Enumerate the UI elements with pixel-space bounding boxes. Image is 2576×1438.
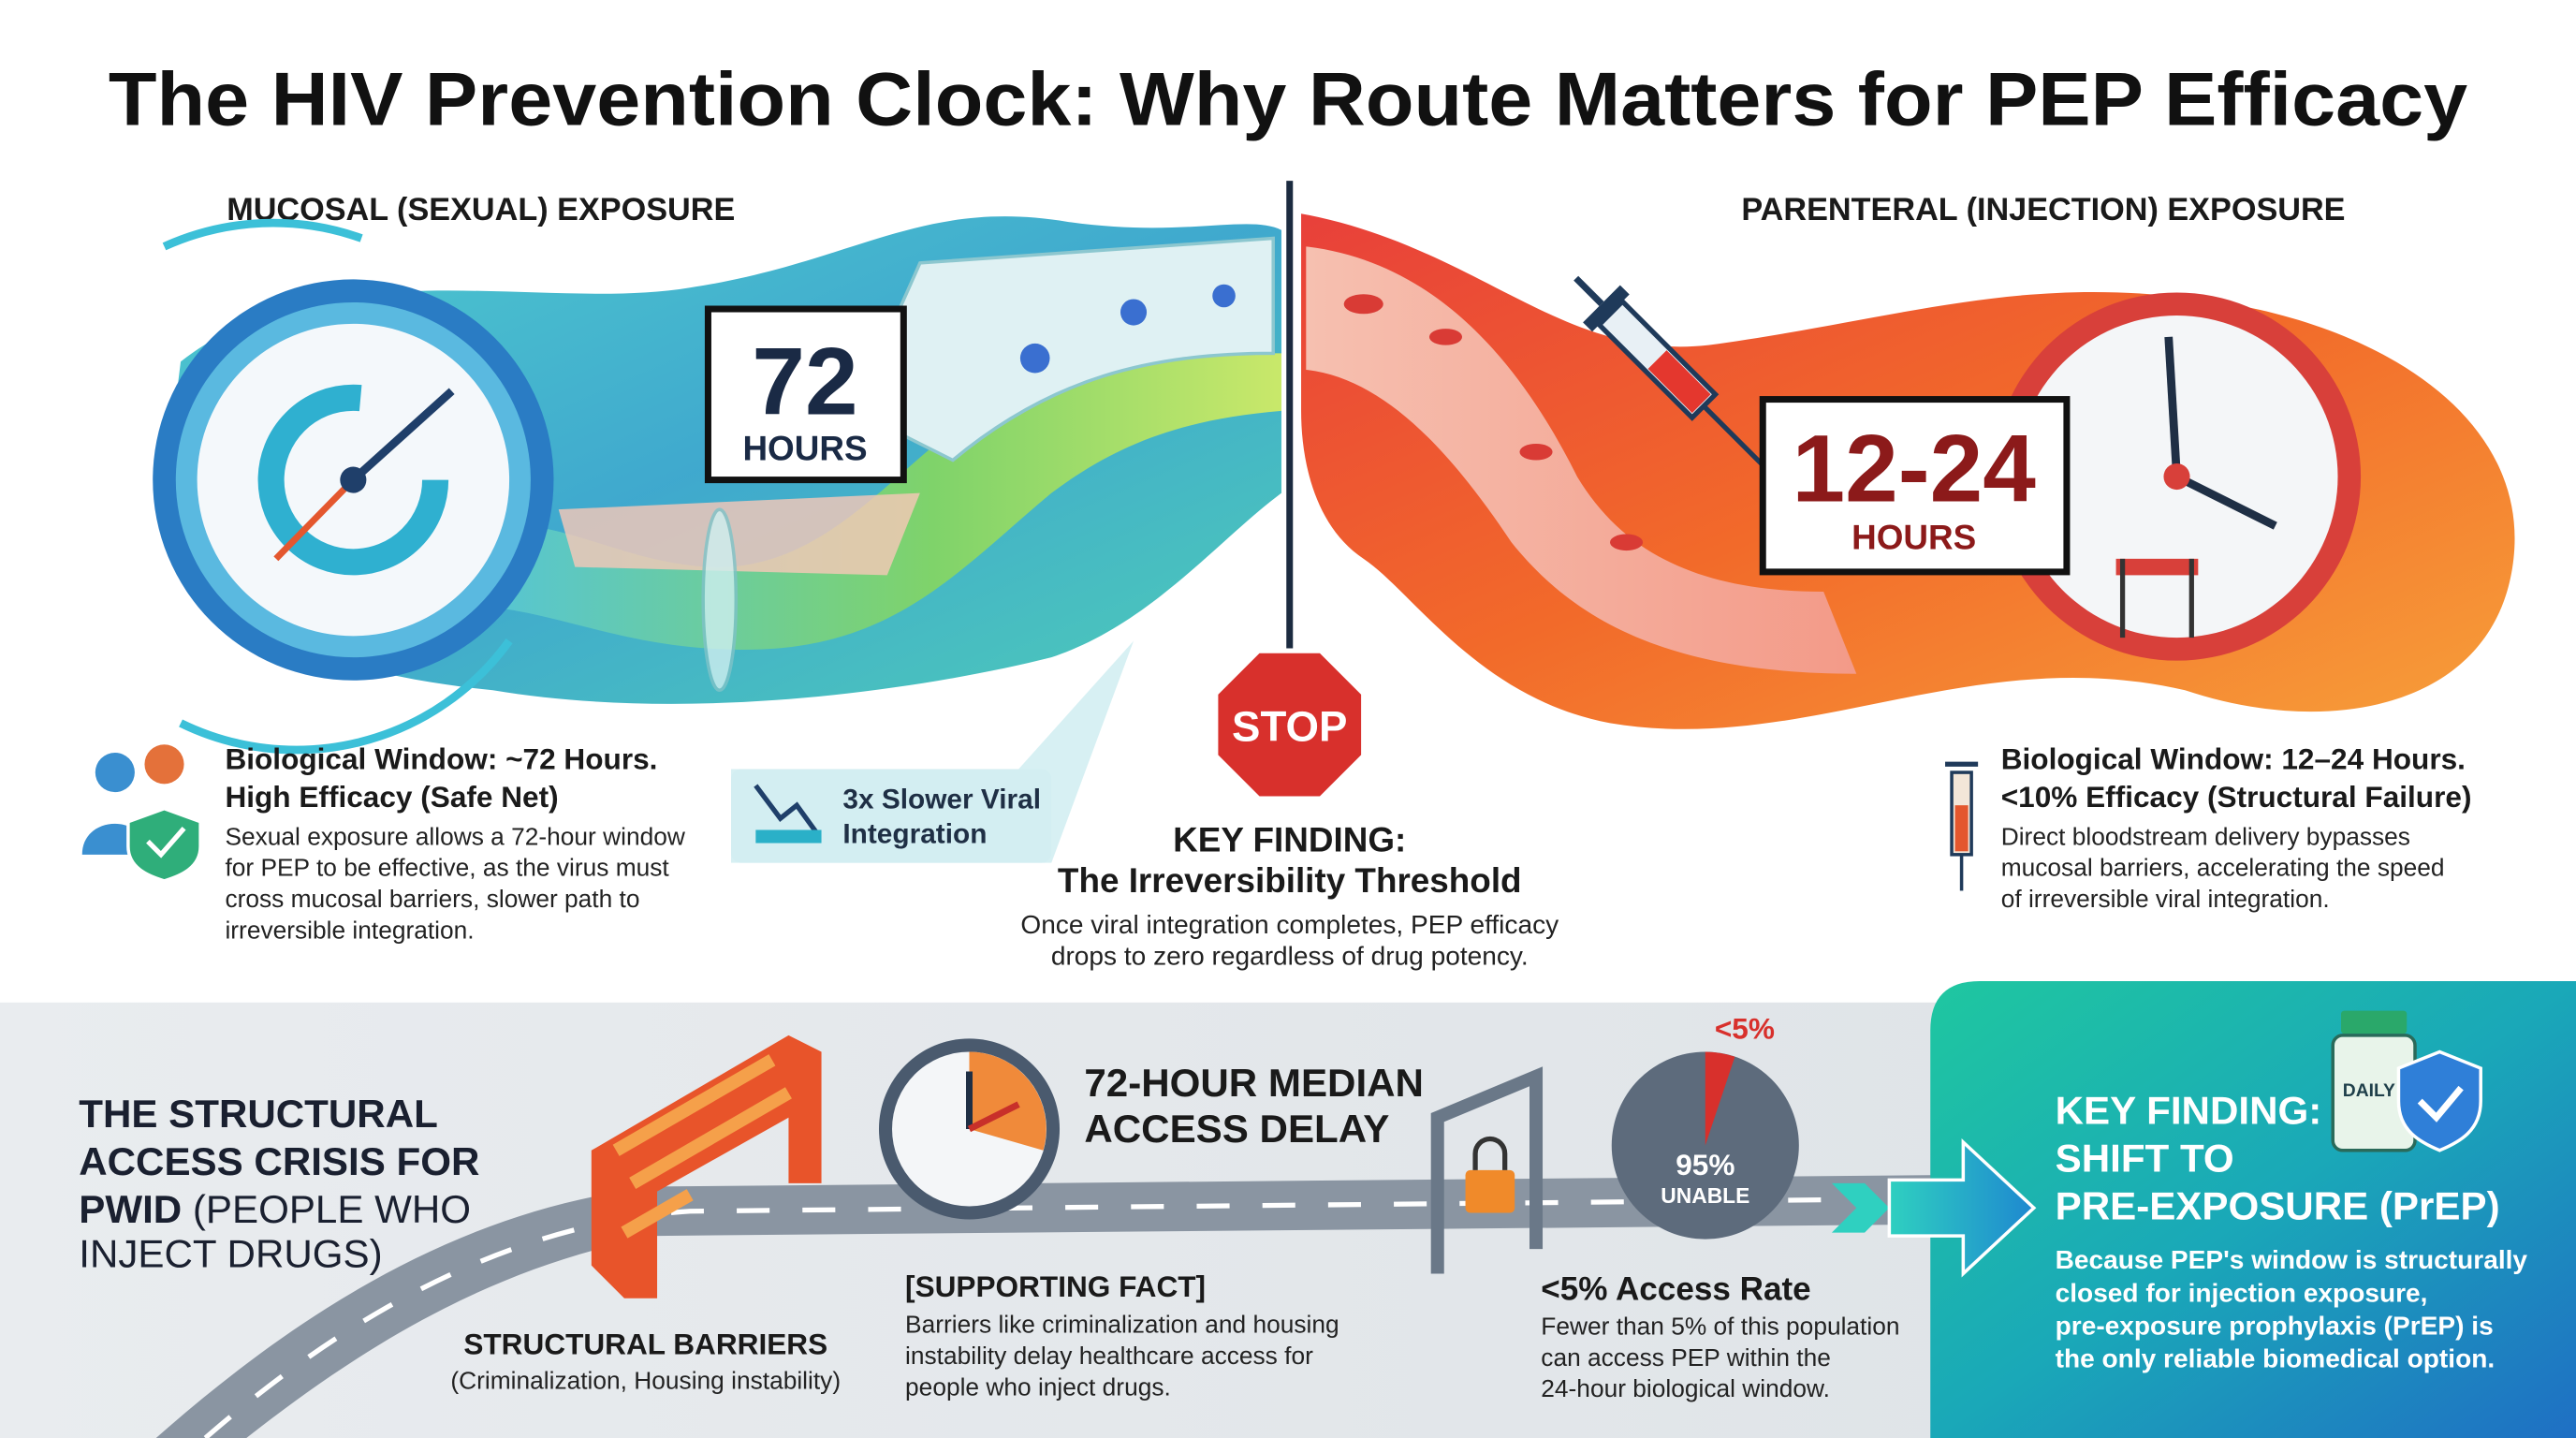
panel: key finding shift to prep: Because PEP's window is structurally [2056,1245,2527,1274]
text: mucosal biological window: High Efficacy (Safe Net) [225,780,559,814]
text: structural barriers: (Criminalization, Housing instability) [450,1366,841,1394]
panel: key finding shift to prep: pre-exposure prophylaxis (PrEP) is [2056,1311,2494,1340]
text: key finding irreversibility: Once viral integration completes, PEP efficacy [1020,910,1559,939]
callout: 72 hours: 72 [752,328,858,434]
text: key finding irreversibility: drops to zero regardless of drug potency. [1051,941,1529,970]
text: structural barriers [450,1327,841,1394]
text: mucosal biological window: for PEP to be effective, as the virus must [225,854,669,882]
chart: pie 95% unable: UNABLE [1661,1183,1749,1208]
text: supporting fact [905,1269,1339,1401]
title: The HIV Prevention Clock: Why Route Matters for PEP Efficacy [109,57,2467,141]
icon: pill bottle and shield [2333,1011,2481,1151]
heading: structural access crisis: PWID (PEOPLE WHO [79,1187,471,1231]
text: mucosal biological window: Sexual exposure allows a 72-hour window [225,822,686,850]
icon: pill bottle and shield: DAILY [2343,1081,2395,1101]
text: supporting fact: instability delay healthcare access for [905,1342,1313,1370]
icon: stop sign [1216,651,1364,799]
callout: 3x slower viral integration: Integration [842,819,987,850]
text: parenteral biological window: Direct bloodstream delivery bypasses [2001,822,2410,850]
text: mucosal biological window: Biological Window: ~72 Hours. [225,742,657,776]
icon: syringe [1558,259,1792,494]
divider line [1288,181,1292,649]
icon: lock gate [1438,1077,1536,1273]
chart: pie 95% unable [1612,1011,1799,1240]
callout: 72 hours [708,309,903,480]
heading: mucosal: MUCOSAL (SEXUAL) EXPOSURE [227,192,735,227]
heading: structural access crisis [79,1092,479,1275]
panel: key finding shift to prep: closed for injection exposure, [2056,1278,2427,1307]
arrow: to prep [1832,1142,2034,1273]
text: access rate: can access PEP within the [1541,1343,1831,1372]
panel: key finding shift to prep: KEY FINDING: [2056,1089,2321,1133]
text: structural barriers: STRUCTURAL BARRIERS [463,1327,827,1360]
heading: 72-hour median access delay: ACCESS DELAY [1084,1107,1389,1151]
text: access rate: <5% Access Rate [1541,1271,1811,1308]
chart: pie 95% unable: <5% [1715,1011,1775,1045]
callout: 12-24 hours [1763,400,2067,572]
callout: 72 hours: HOURS [742,430,868,468]
icon: barrier [592,1035,822,1299]
heading: 72-hour median access delay: 72-HOUR MEDIAN [1084,1061,1424,1105]
panel: parenteral illustration [1301,213,2515,729]
chart: pie 95% unable: 95% [1676,1148,1734,1181]
text: access rate: Fewer than 5% of this population [1541,1312,1899,1340]
icon: left clock [153,223,553,750]
text: parenteral biological window: <10% Efficacy (Structural Failure) [2001,780,2471,814]
text: access rate: 24-hour biological window. [1541,1374,1830,1402]
text: key finding irreversibility: KEY FINDING: [1173,820,1406,858]
icon: stop sign: STOP [1232,703,1347,751]
icon: people with shield [82,744,200,881]
heading: 72-hour median access delay [1084,1061,1424,1151]
text: mucosal biological window: cross mucosal barriers, slower path to [225,885,640,913]
text: supporting fact: people who inject drugs. [905,1372,1171,1401]
text: access rate [1541,1271,1899,1402]
icon: delay clock [879,1038,1060,1220]
panel: key finding shift to prep [1930,981,2576,1438]
text: parenteral biological window: Biological Window: 12–24 Hours. [2001,742,2466,776]
text: parenteral biological window: of irreversible viral integration. [2001,885,2330,913]
panel: key finding shift to prep: PRE-EXPOSURE (PrEP) [2056,1184,2500,1228]
text: key finding irreversibility: The Irreversibility Threshold [1058,861,1522,900]
callout: 12-24 hours: 12-24 [1793,415,2036,521]
heading: structural access crisis: INJECT DRUGS) [79,1231,383,1275]
text: supporting fact: Barriers like criminalization and housing [905,1311,1339,1339]
icon: small syringe [1945,764,1978,890]
text: key finding irreversibility [1020,820,1559,970]
text: mucosal biological window: irreversible integration. [225,916,475,944]
text: supporting fact: [SUPPORTING FACT] [905,1269,1206,1303]
panel: key finding shift to prep: SHIFT TO [2056,1137,2234,1181]
heading: structural access crisis: THE STRUCTURAL [79,1092,438,1136]
heading: structural access crisis: ACCESS CRISIS FOR [79,1139,479,1183]
panel: key finding shift to prep: the only reliable biomedical option. [2056,1344,2495,1373]
callout: 3x slower viral integration: 3x Slower Viral [842,785,1041,815]
icon: right clock [1993,292,2361,661]
text: parenteral biological window [2001,742,2471,913]
panel: mucosal illustration [165,216,1281,704]
panel: bottom band [0,1003,2576,1438]
text: parenteral biological window: mucosal barriers, accelerating the speed [2001,854,2445,882]
heading: parenteral: PARENTERAL (INJECTION) EXPOSURE [1741,192,2346,227]
callout: 3x slower viral integration [731,641,1134,863]
text: mucosal biological window [225,742,686,944]
callout: 12-24 hours: HOURS [1852,518,1976,556]
